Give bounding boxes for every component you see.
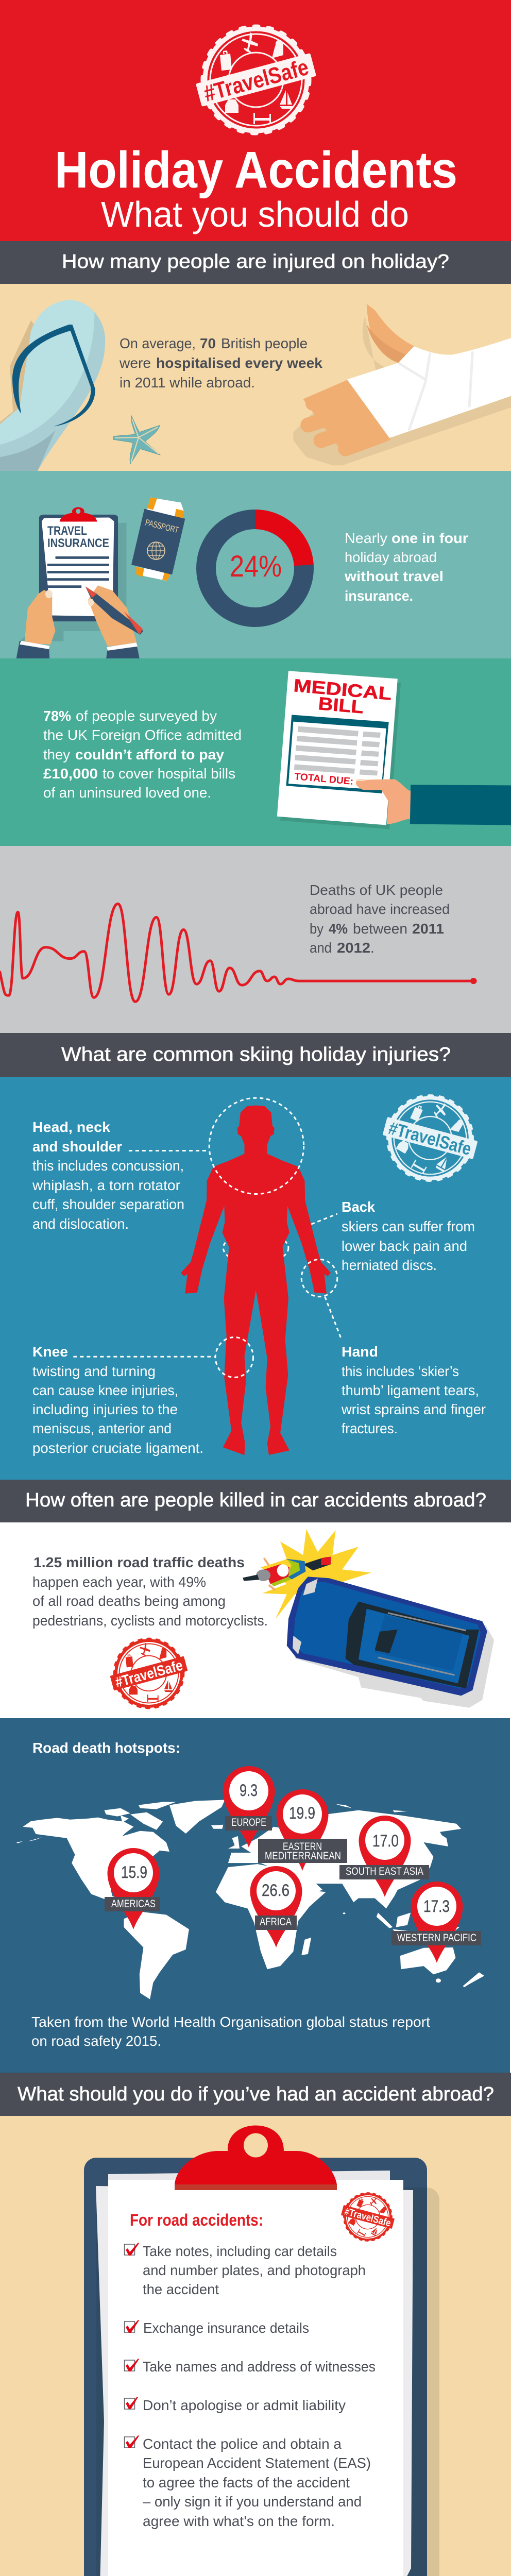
text: head, neck and shoulder: Head, neck: [32, 1119, 110, 1135]
checklist: road accidents: [125, 2243, 376, 2529]
pin: Americas 15.9: [105, 1848, 160, 1929]
text: deaths increased: 2012: [337, 940, 370, 956]
chart: 24% donut: [206, 510, 314, 617]
chart: heartbeat line: [0, 904, 477, 1002]
text: 70 British people: British people: [221, 335, 308, 351]
pin: Eastern Mediterranean 19.9: MEDITERRANEAN: [265, 1850, 341, 1862]
text: hand: this includes ‘skier’s: [342, 1363, 459, 1379]
checklist: road accidents: and number plates, and photograph: [143, 2262, 366, 2278]
checklist: road accidents: European Accident Statement (EAS): [143, 2455, 371, 2471]
pin: Europe 9.3: [223, 1766, 275, 1848]
icon: medical bill: TOTAL DUE:: [294, 771, 354, 787]
pin: South East Asia 17.0: 17.0: [372, 1832, 399, 1850]
text: one in four: one in four: [391, 530, 468, 546]
text: 70 British people: 70: [200, 335, 216, 351]
text: travel insurance clipboard title: INSURANCE: [47, 536, 109, 550]
text: knee: posterior cruciate ligament.: [32, 1440, 203, 1456]
text: knee: can cause knee injuries,: [32, 1382, 178, 1398]
text: knee: twisting and turning: [32, 1363, 156, 1379]
text: 78% of people: [43, 708, 242, 801]
heading: skiing injuries: [0, 1033, 511, 1077]
stamp: TravelSafe logo: #TravelSafe: [201, 55, 311, 107]
icon: starfish: [113, 416, 160, 464]
pin: Africa 26.6: 26.6: [262, 1881, 289, 1900]
text: source note: on road safety 2015.: [31, 2033, 161, 2049]
text: one in four: insurance.: [345, 588, 413, 604]
panel: hospitalised stat: [0, 284, 511, 471]
text: 78% of people: the UK Foreign Office admitted: [43, 727, 242, 743]
icon: bandaged hand: [293, 304, 511, 465]
text: head, neck and shoulder: cuff, shoulder separation: [32, 1196, 184, 1212]
icon: flip flop: [0, 300, 105, 471]
chart: 24% donut: 24%: [230, 550, 282, 583]
pin: Eastern Mediterranean 19.9: [258, 1789, 347, 1871]
text: 1.25 million: 1.25 million road traffic deaths: [33, 1554, 245, 1570]
panel: header: [0, 0, 511, 241]
heading: car accidents: [0, 1480, 511, 1522]
heading: what should you do: What should you do if you’ve had an accident abroad?: [18, 2083, 494, 2105]
text: back: [342, 1199, 475, 1273]
stamp: TravelSafe white: [368, 1078, 493, 1199]
clipboard: road accidents: [84, 2126, 439, 2576]
checklist: road accidents: – only sign it if you understand and: [143, 2494, 362, 2510]
text: 78% of people: of people surveyed by: [76, 708, 217, 724]
heading: how many people: [0, 241, 511, 284]
text: back: Back: [342, 1199, 375, 1215]
text: hand: fractures.: [342, 1420, 398, 1436]
checklist: road accidents: to agree the facts of the accident: [143, 2475, 350, 2490]
text: back: skiers can suffer from: [342, 1218, 475, 1234]
text: 78% of people: of an uninsured loved one.: [43, 785, 211, 801]
stamp: TravelSafe red: [110, 1639, 188, 1708]
text: 78% of people: 78%: [43, 708, 71, 724]
text: deaths increased: and: [310, 940, 332, 956]
text: source note: Taken from the World Health Organisation global status report: [31, 2014, 430, 2030]
text: deaths increased: abroad have increased: [310, 901, 450, 917]
stamp: TravelSafe red: #TravelSafe: [113, 1657, 184, 1691]
text: 78% of people: they: [43, 747, 70, 762]
stamp: TravelSafe road: #TravelSafe: [343, 2206, 392, 2229]
text: 70 British people: in 2011 while abroad.: [120, 375, 255, 391]
text: deaths increased: .: [370, 940, 374, 956]
heading: car accidents: How often are people killed in car accidents abroad?: [25, 1489, 486, 1511]
text: one in four: [344, 530, 468, 604]
subtitle: What you should do: [101, 194, 409, 234]
pin: Americas 15.9: 15.9: [121, 1863, 147, 1882]
text: knee: including injuries to the: [32, 1401, 178, 1417]
panel: road death hotspots: [0, 1718, 510, 2073]
icon: insurance clipboard: [16, 507, 143, 658]
text: source note: [31, 2014, 430, 2049]
panel: skiing injuries: [0, 1077, 511, 1480]
text: head, neck and shoulder: this includes concussion,: [32, 1158, 184, 1174]
text: 70 British people: were: [119, 355, 151, 371]
text: 1.25 million: of all road deaths being among: [32, 1593, 226, 1609]
checklist: road accidents: agree with what’s on the form.: [143, 2513, 335, 2529]
text: deaths increased: 4%: [329, 921, 348, 937]
text: deaths increased: 2011: [412, 921, 444, 937]
text: 78% of people: £10,000: [43, 766, 98, 782]
checklist: road accidents: Don’t apologise or admit liability: [143, 2397, 346, 2413]
text: back: herniated discs.: [342, 1257, 437, 1273]
pin: Eastern Mediterranean 19.9: EASTERN: [283, 1841, 322, 1853]
icon: passport: PASSPORT: [144, 517, 180, 535]
icon: medical bill: BILL: [317, 693, 364, 718]
text: 1.25 million: [32, 1554, 268, 1629]
diagram: body with injury zones: [73, 1098, 342, 1455]
text: one in four: without travel: [344, 568, 444, 584]
panel: deaths stat: [0, 846, 511, 1033]
text: deaths increased: Deaths of UK people: [310, 882, 443, 898]
panel: road deaths: [0, 1522, 511, 1718]
panel: medical bill stat: [0, 658, 511, 846]
heading: how many people: How many people are injured on holiday?: [62, 251, 449, 273]
text: 1.25 million: pedestrians, cyclists and motorcyclists.: [32, 1613, 268, 1629]
pin: Africa 26.6: [250, 1866, 302, 1947]
pin: Africa 26.6: AFRICA: [260, 1916, 292, 1928]
pin: South East Asia 17.0: [339, 1816, 429, 1897]
heading: skiing injuries: What are common skiing holiday injuries?: [61, 1044, 451, 1065]
pin: Western Pacific 17.3: 17.3: [423, 1897, 450, 1916]
text: 70 British people: [119, 335, 322, 391]
text: 78% of people: to cover hospital bills: [103, 766, 235, 782]
icon: passport: [131, 497, 185, 581]
text: hand: [341, 1344, 486, 1436]
checklist: road accidents: the accident: [143, 2281, 219, 2297]
text: 70 British people: On average,: [120, 335, 196, 351]
heading: hotspots: Road death hotspots:: [32, 1740, 180, 1756]
text: head, neck and shoulder: and dislocation.: [32, 1216, 129, 1232]
checklist: road accidents: Exchange insurance details: [143, 2320, 309, 2336]
heading: what should you do: [0, 2073, 511, 2116]
pin: Western Pacific 17.3: [391, 1882, 481, 1963]
icon: medical bill: [277, 671, 511, 829]
text: deaths increased: between: [353, 921, 407, 937]
text: one in four: holiday abroad: [345, 549, 437, 565]
panel: road accidents checklist: [0, 2116, 511, 2576]
icon: crashed car and motorcycle: [243, 1529, 494, 1708]
text: 70 British people: hospitalised every week: [156, 355, 322, 371]
text: knee: meniscus, anterior and: [32, 1420, 172, 1436]
stamp: TravelSafe road: [333, 2183, 403, 2251]
heading: for road accidents: For road accidents:: [130, 2211, 263, 2229]
pin: Eastern Mediterranean 19.9: 19.9: [289, 1804, 315, 1822]
pin: Europe 9.3: 9.3: [240, 1781, 258, 1800]
text: hand: Hand: [342, 1344, 378, 1360]
checklist: road accidents: Take names and address of witnesses: [143, 2359, 376, 2375]
text: travel insurance clipboard title: TRAVEL: [47, 524, 87, 538]
text: back: lower back pain and: [342, 1238, 467, 1254]
pin: Americas 15.9: AMERICAS: [111, 1898, 156, 1910]
text: head, neck and shoulder: [32, 1119, 184, 1232]
pin: Western Pacific 17.3: WESTERN PACIFIC: [397, 1932, 476, 1944]
stamp: TravelSafe white: #TravelSafe: [386, 1118, 473, 1159]
icon: medical bill: MEDICAL: [293, 675, 393, 704]
text: 78% of people: couldn’t afford to pay: [75, 747, 224, 762]
text: knee: [32, 1344, 203, 1456]
stamp: TravelSafe logo: [196, 26, 317, 133]
checklist: road accidents: Take notes, including car details: [143, 2243, 337, 2259]
text: head, neck and shoulder: whiplash, a torn rotator: [32, 1177, 180, 1193]
text: hand: thumb’ ligament tears,: [342, 1382, 479, 1398]
map: world: [16, 1800, 484, 1999]
text: one in four: Nearly: [345, 530, 387, 546]
pin: Europe 9.3: EUROPE: [231, 1817, 266, 1828]
text: deaths increased: by: [310, 921, 323, 937]
checklist: road accidents: Contact the police and obtain a: [143, 2436, 342, 2452]
text: head, neck and shoulder: and shoulder: [32, 1139, 122, 1155]
pin: South East Asia 17.0: SOUTH EAST ASIA: [346, 1866, 423, 1877]
text: hand: wrist sprains and finger: [341, 1401, 486, 1417]
title: Holiday Accidents: [55, 141, 457, 199]
text: travel insurance clipboard title: [47, 524, 109, 550]
panel: travel insurance stat: [0, 471, 511, 658]
text: 1.25 million: happen each year, with 49%: [32, 1574, 206, 1590]
text: knee: Knee: [32, 1344, 68, 1360]
text: deaths increased: [310, 882, 450, 956]
